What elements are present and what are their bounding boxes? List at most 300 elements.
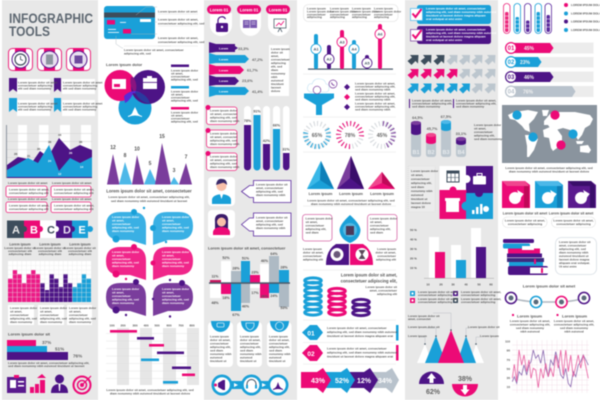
puzzle: C bbox=[47, 224, 55, 236]
area chart: 14 bbox=[80, 165, 84, 169]
icon: rising bars bbox=[30, 374, 46, 393]
diverging bar chart: 28% bbox=[280, 266, 288, 270]
icon cards with text: Lorem ipsum bbox=[210, 334, 229, 338]
cylinder chart: 67,5% bbox=[441, 115, 452, 119]
ribbons with text: consectetuer adipiscing bbox=[63, 104, 98, 108]
ribbons with text bbox=[9, 78, 102, 116]
arrow grid notes: sed diam nonummy bbox=[412, 104, 441, 108]
arrow percentage list: Lorem bbox=[219, 68, 229, 72]
triangle chart caption: sed diam nonummy nibh euismod tincidunt ut laoreet bbox=[111, 199, 187, 203]
cube captions: Lorem ipsum dolor sit amet, bbox=[505, 218, 545, 222]
diamond list: sed diam nonummy nibh bbox=[355, 98, 391, 102]
pyramids caption bbox=[307, 198, 395, 206]
pyramids caption: Lorem ipsum dolor sit amet, consectetuer adipiscing elit, sed bbox=[307, 198, 395, 202]
pin chart: A2 bbox=[326, 56, 332, 62]
venn legend: consectetuer bbox=[171, 116, 191, 120]
text cards: adipiscing elit, sed bbox=[10, 316, 37, 320]
timeline items: Lorem ipsum dolor sit amet, bbox=[554, 319, 594, 323]
arrow grid notes: consectetuer adipiscing elit, bbox=[456, 102, 497, 106]
cube captions: Lorem ipsum dolor sit amet bbox=[503, 212, 548, 216]
arrow percentage list: 23,6% bbox=[242, 79, 253, 83]
cylinder chart note: consectetuer bbox=[474, 130, 494, 134]
half circle 62%: 62% bbox=[426, 389, 441, 396]
checklist banners: adipiscing elit, sed diam nonummy nibh euismod bbox=[426, 10, 496, 14]
icon cards with text: consectetuer bbox=[240, 342, 260, 346]
callout: man: Lorem ipsum dolor sit bbox=[256, 182, 288, 186]
puzzle: B bbox=[30, 224, 38, 236]
cylinder chart note: sed diam nonummy bbox=[474, 137, 503, 141]
speech bubbles bbox=[106, 207, 193, 318]
vertical progress bars: 91% bbox=[253, 110, 261, 114]
cube captions bbox=[502, 212, 596, 228]
bar chart legend: Lorem ipsum dolor sit amet, bbox=[418, 290, 458, 294]
text cards: Lorem ipsum dolor bbox=[69, 306, 97, 310]
books note: aliquam erat volutpat. bbox=[559, 261, 590, 265]
half circle 62% bbox=[419, 372, 444, 396]
puzzle: consectetuer elit bbox=[38, 249, 62, 253]
puzzle: adipiscing diam bbox=[9, 252, 32, 256]
cylinder chart note: adipiscing elit, bbox=[474, 134, 495, 138]
pink text cards: Lorem ipsum dolor bbox=[210, 108, 238, 112]
stacked percentage bars: sed diam nonummy nibh euismod tincidunt ut laoreet bbox=[8, 364, 84, 368]
avatar: man bbox=[208, 177, 235, 206]
callout: woman: adipiscing elit, sed bbox=[256, 222, 283, 226]
speech bubbles: Lorem ipsum dolor bbox=[162, 287, 190, 291]
cylinder chart: B1 bbox=[412, 150, 420, 156]
cylinder chart: B4 bbox=[457, 150, 465, 156]
vertical progress bars: 66% bbox=[273, 124, 281, 128]
petal diagram: consectetuer bbox=[377, 254, 397, 258]
cylinder chart: B2 bbox=[427, 150, 435, 156]
gantt chart: 400 bbox=[143, 324, 149, 328]
pill icon cards: Lorem 01 bbox=[210, 8, 229, 12]
map caption: diam nonummy nibh euismod tincidunt ut laoreet dolore bbox=[509, 170, 589, 174]
text boxes with pink outline: consectetuer adipiscing elit bbox=[9, 207, 49, 211]
text boxes with pink outline: Lorem ipsum dolor sit amet bbox=[52, 181, 91, 185]
books note bbox=[556, 238, 596, 274]
arrow grid notes: consectetuer adipiscing elit, bbox=[412, 102, 453, 106]
bar chart legend: consectetuer adipiscing bbox=[461, 300, 496, 304]
diamond list: Lorem ipsum dolor sit amet, bbox=[355, 92, 395, 96]
numbered row 02 bbox=[302, 345, 398, 361]
puzzle: E bbox=[78, 224, 86, 236]
petal diagram: dolor sit amet, bbox=[375, 250, 396, 254]
triangle chart caption: Lorem ipsum dolor sit amet, consectetuer adipiscing elit, bbox=[108, 195, 190, 199]
top text panel: Lorem ipsum dolor bbox=[330, 10, 358, 14]
stacked percentage bars: 37% bbox=[42, 340, 51, 345]
diverging bar chart: 48% bbox=[211, 301, 219, 305]
diverging bar chart: Lorem ipsum dolor sit amet, consectetuer bbox=[208, 246, 286, 250]
bar chart: 10 bbox=[426, 282, 430, 286]
chevron percentages: 43% bbox=[311, 378, 326, 385]
side note box: sit amet, bbox=[411, 173, 423, 177]
gauge values bbox=[312, 133, 388, 139]
top text panel: adipiscing bbox=[330, 15, 345, 19]
cube captions: Lorem ipsum dolor sit amet bbox=[549, 212, 594, 216]
icon cards with text: euismod bbox=[210, 356, 223, 360]
text cards: sit amet, bbox=[10, 310, 22, 314]
icon cards with text: sed diam bbox=[269, 348, 282, 352]
icon cards with text: Lorem ipsum bbox=[269, 334, 288, 338]
bar chart legend: Lorem ipsum dolor sit amet, bbox=[461, 290, 501, 294]
speech bubbles: diam nonummy bbox=[162, 301, 185, 305]
side note box: Lorem ipsum dolor bbox=[411, 169, 439, 173]
numbered progress bars: 45% bbox=[524, 46, 535, 52]
checklist banners: erat volutpat ut wisi enim bbox=[426, 38, 462, 42]
pin chart: A5 bbox=[364, 60, 370, 66]
triangle chart: 12 bbox=[110, 145, 116, 151]
diverging bar chart: 46% bbox=[261, 259, 269, 263]
area chart: 30 bbox=[37, 147, 41, 151]
checklist banners: tincidunt ut laoreet dolore magna aliquam bbox=[426, 14, 486, 18]
venn legend: adipiscing elit, sed bbox=[171, 78, 198, 82]
checklist banners: Lorem ipsum dolor sit amet, consectetuer bbox=[426, 6, 487, 10]
bar chart: 40 % bbox=[410, 238, 417, 242]
text cards: consectetuer bbox=[10, 313, 30, 317]
diverging bar chart: 28% bbox=[232, 266, 240, 270]
stacked percentage bars: Lorem ipsum dolor sit bbox=[8, 332, 51, 336]
pyramids: Lorem ipsum bbox=[309, 192, 333, 196]
callout: woman: diam nonummy nibh bbox=[256, 226, 286, 230]
arrow percentage list bbox=[209, 42, 263, 97]
books bbox=[503, 239, 548, 275]
line chart bbox=[505, 340, 589, 393]
diamond list: consectetuer adipiscing elit, bbox=[355, 84, 396, 88]
text cards: diam nonummy bbox=[40, 320, 63, 324]
card callouts text: Lorem ipsum dolor sit amet, bbox=[158, 18, 198, 22]
diverging bar chart: 23% bbox=[251, 270, 259, 274]
pin chart: A4 bbox=[351, 46, 357, 52]
puzzle: Lorem ipsum dolor sit bbox=[34, 246, 66, 250]
books note: Lorem ipsum dolor sit bbox=[559, 240, 591, 244]
speech bubbles: Lorem ipsum dolor bbox=[162, 250, 190, 254]
area chart: 44 bbox=[58, 133, 62, 137]
pink text cards: diam nonummy nibh bbox=[210, 165, 240, 169]
map caption: Lorem ipsum dolor sit amet, consectetuer adipiscing elit, sed bbox=[505, 166, 593, 170]
numbered progress bars: 23% bbox=[520, 60, 531, 66]
petal diagram bbox=[302, 214, 398, 265]
area chart: 36 bbox=[48, 140, 52, 144]
side text card: nibh bbox=[271, 75, 277, 79]
icon cards with text: nonummy nibh bbox=[240, 352, 262, 356]
numbered row 01: 01 bbox=[307, 330, 315, 338]
numbered row 02: adipiscing elit, sed diam nonummy nibh euismod bbox=[327, 350, 397, 354]
side note box: consectetuer bbox=[411, 177, 431, 181]
puzzle: Lorem ipsum bbox=[9, 242, 31, 246]
gantt chart bbox=[106, 324, 199, 385]
side note box: nonummy nibh bbox=[411, 189, 433, 193]
triangle chart: 10 bbox=[134, 146, 140, 152]
speech bubbles: Lorem ipsum dolor bbox=[112, 215, 140, 219]
ribbons with text: elit sed diam nonummy bbox=[18, 108, 52, 112]
thermometer gauges bbox=[504, 4, 552, 34]
pin chart: A1 bbox=[313, 46, 319, 52]
cylinder chart: 33,1% bbox=[456, 132, 467, 136]
pixel bar chart bbox=[8, 261, 91, 302]
text cards: consectetuer bbox=[40, 313, 60, 317]
petal diagram: adipiscing elit, bbox=[306, 227, 327, 231]
checklist banners: Lorem ipsum dolor sit amet, consectetuer bbox=[426, 28, 487, 32]
icon cards with text: adipiscing elit, bbox=[240, 345, 261, 349]
timeline items: Lorem ipsum bbox=[562, 314, 588, 318]
arrow percentage list: Lorem bbox=[219, 79, 229, 83]
ribbons with text: elit sed diam nonummy bbox=[63, 86, 97, 90]
puzzle: adipiscing diam bbox=[39, 252, 62, 256]
pink text cards: diam nonummy nibh bbox=[210, 119, 240, 123]
text boxes with pink outline: Lorem ipsum dolor sit amet, bbox=[9, 204, 49, 208]
icon cards with text: Lorem ipsum bbox=[240, 334, 259, 338]
pink text cards: sit amet, consectet bbox=[210, 112, 237, 116]
speech bubbles: diam nonummy bbox=[162, 264, 185, 268]
top text panel: consectetuer bbox=[352, 12, 372, 16]
speech bubbles: Lorem ipsum dolor bbox=[112, 250, 140, 254]
pink text cards: adipiscing elit, sed bbox=[210, 116, 237, 120]
gantt chart: 300 bbox=[132, 324, 138, 328]
avatar: woman bbox=[208, 210, 235, 238]
speech bubbles: Lorem ipsum dolor bbox=[112, 287, 140, 291]
triangle chart: 8 bbox=[124, 153, 127, 159]
bar chart legend: Lorem ipsum dolor sit amet, bbox=[461, 297, 501, 301]
side note box: adipiscing elit, bbox=[411, 181, 432, 185]
speech bubbles: adipiscing elit, sed bbox=[112, 260, 139, 264]
diverging bar chart: 11% bbox=[212, 274, 219, 278]
vertical progress bars bbox=[244, 106, 290, 170]
ring stacks text: Lorem ipsum dolor sit amet, bbox=[341, 272, 397, 278]
bar chart: 60 bbox=[489, 282, 493, 286]
bar chart: 20 % bbox=[410, 256, 417, 260]
top text panel: Lorem ipsum bbox=[307, 6, 326, 10]
icon cards with text: adipiscing elit, bbox=[210, 345, 231, 349]
bar chart legend: consectetuer adipiscing bbox=[461, 293, 496, 297]
top text panel: Lorem ipsum dolor bbox=[307, 10, 335, 14]
numbered row 01: Lorem ipsum dolor sit amet, consectetuer bbox=[327, 326, 388, 330]
books note: euismod tincidunt ut bbox=[559, 254, 588, 258]
top text panel: consectetuer bbox=[307, 12, 327, 16]
icon cards with text: sed diam bbox=[210, 348, 223, 352]
top text panel bbox=[304, 4, 402, 22]
cylinder chart note bbox=[474, 123, 503, 141]
numbered row 02: tincidunt ut laoreet dolore magna aliquam erat bbox=[327, 354, 393, 358]
top text panel: Lorem ipsum bbox=[374, 6, 393, 10]
arrow percentage list: 61,7% bbox=[247, 68, 258, 72]
top text panel: adipiscing bbox=[374, 15, 389, 19]
chevron percentages bbox=[301, 368, 399, 393]
text boxes with pink outline: Lorem ipsum dolor sit amet bbox=[8, 181, 47, 185]
venn legend: sit amet, bbox=[171, 72, 183, 76]
timeline items: nibh euismod bbox=[520, 330, 540, 334]
diamond list: Lorem ipsum dolor sit amet, bbox=[355, 102, 395, 106]
speech bubbles: sit amet, bbox=[162, 254, 174, 258]
pink text cards: diam nonummy nibh bbox=[210, 142, 240, 146]
venn legend: sit amet, bbox=[171, 92, 183, 96]
cylinder chart: 64,5% bbox=[412, 116, 423, 120]
icon cards with text: dolor sit amet, bbox=[240, 338, 261, 342]
radial gauges bbox=[301, 119, 394, 151]
icon: target bbox=[74, 376, 91, 394]
bar chart: 20 bbox=[439, 282, 443, 286]
timeline bbox=[505, 284, 590, 308]
petal diagram: Lorem ipsum bbox=[303, 247, 322, 251]
speech bubbles: sit amet, bbox=[112, 218, 124, 222]
bar chart: 50 % bbox=[410, 228, 417, 232]
timeline: Lorem ipsum dolor sit amet bbox=[523, 284, 576, 288]
credit card bbox=[104, 6, 198, 48]
gantt chart: 500 bbox=[154, 324, 160, 328]
speech bubbles: adipiscing elit, sed bbox=[162, 226, 189, 230]
ring stacks bbox=[305, 278, 369, 316]
arrow grid notes: sed diam nonummy bbox=[456, 104, 485, 108]
diverging bar chart: 64% bbox=[270, 252, 278, 256]
bar chart legend: consectetuer adipiscing bbox=[418, 300, 453, 304]
diverging bar chart: 53% bbox=[280, 306, 288, 310]
half circle 38% bbox=[452, 376, 478, 396]
gantt caption: diam nonummy nibh euismod tincidunt ut laoreet dolore bbox=[110, 392, 190, 396]
speech bubbles: diam nonummy bbox=[112, 229, 135, 233]
line chart: 50 bbox=[507, 367, 510, 371]
top text panel: Lorem ipsum bbox=[330, 6, 349, 10]
speech bubbles: diam nonummy bbox=[162, 229, 185, 233]
speech bubbles: sit amet, bbox=[112, 290, 124, 294]
ribbons with text: Lorem ipsum dolor sit amet bbox=[18, 102, 57, 106]
diamond list: consectetuer adipiscing elit, bbox=[355, 104, 396, 108]
venn legend: Lorem ipsum dolor bbox=[171, 110, 199, 114]
bar chart legend: consectetuer adipiscing bbox=[418, 293, 453, 297]
numbered row 01: tincidunt ut laoreet dolore magna aliquam erat bbox=[327, 334, 393, 338]
numbered progress bars bbox=[505, 42, 594, 98]
text cards bbox=[8, 305, 97, 325]
pin chart: A3 bbox=[339, 40, 345, 44]
timeline items: consectetuer adipiscing elit, bbox=[510, 322, 550, 326]
diamond list: Lorem ipsum dolor sit amet, bbox=[355, 82, 395, 86]
pink text cards bbox=[206, 105, 240, 170]
side text card: euismod bbox=[271, 78, 284, 82]
side note box bbox=[408, 166, 439, 212]
card callouts text: Lorem ipsum dolor sit amet, consectetuer bbox=[124, 48, 185, 52]
pill icon cards bbox=[207, 5, 290, 36]
icon: id badge bbox=[7, 375, 26, 393]
petal diagram: adipiscing elit, bbox=[370, 227, 391, 231]
speech bubbles: diam nonummy bbox=[112, 264, 135, 268]
venn legend: Lorem ipsum dolor bbox=[171, 68, 199, 72]
area chart: 28 bbox=[14, 152, 18, 156]
gauge values: 45% bbox=[377, 133, 388, 139]
side text card: consectetuer bbox=[271, 58, 291, 62]
petal diagram: consectetuer bbox=[370, 224, 390, 228]
speech bubbles: consectetuer bbox=[112, 222, 132, 226]
world map bbox=[502, 105, 597, 163]
petal diagram: sit amet, bbox=[370, 220, 382, 224]
checklist banners: adipiscing elit, sed diam nonummy nibh euismod bbox=[426, 31, 496, 35]
timeline items: consectetuer adipiscing elit, bbox=[554, 322, 594, 326]
text cards: sit amet, bbox=[40, 310, 52, 314]
pyramids caption: diam nonummy nibh euismod tincidunt ut laoreet dolore bbox=[311, 202, 391, 206]
puzzle bbox=[4, 220, 96, 256]
cylinder chart bbox=[411, 115, 467, 157]
ring stacks text: consectetuer adipiscing elit, bbox=[341, 278, 397, 284]
gantt chart: 600 bbox=[166, 324, 172, 328]
card callouts text bbox=[124, 10, 205, 56]
top text panel: consectetuer bbox=[330, 12, 350, 16]
numbered progress bars: 46% bbox=[524, 75, 535, 81]
ribbons with text: Lorem ipsum dolor sit amet bbox=[18, 80, 57, 84]
diverging bar chart: 51% bbox=[242, 256, 250, 260]
speech bubbles: consectetuer bbox=[112, 257, 132, 261]
gantt chart: 100 bbox=[109, 324, 115, 328]
area chart bbox=[6, 125, 92, 178]
callout: woman: Lorem ipsum dolor sit bbox=[256, 216, 288, 220]
puzzle: Lorem ipsum bbox=[39, 242, 61, 246]
petal diagram: consectetuer bbox=[306, 224, 325, 228]
ribbons with text: elit sed diam nonummy bbox=[63, 108, 97, 112]
title: INFOGRAPHIC bbox=[9, 11, 93, 26]
icon cards with text: adipiscing elit, bbox=[269, 345, 290, 349]
top text panel: Lorem ipsum dolor bbox=[352, 10, 380, 14]
diverging bar chart: 52% bbox=[222, 256, 230, 260]
funnel bbox=[304, 79, 337, 115]
gantt caption bbox=[106, 388, 194, 396]
text boxes with pink outline: Lorem ipsum dolor sit amet bbox=[52, 197, 91, 201]
arrow grid notes: Lorem ipsum dolor sit amet, bbox=[456, 98, 496, 102]
triangle group chart: Lorem ipsum bbox=[480, 334, 499, 338]
pink text cards: Lorem ipsum dolor bbox=[210, 154, 238, 158]
icon cards with text: sed diam bbox=[240, 348, 253, 352]
side note box: sed diam bbox=[411, 185, 424, 189]
speech bubbles: sit amet, bbox=[162, 290, 174, 294]
gauge values: 65% bbox=[312, 133, 323, 139]
text boxes with pink outline: Lorem ipsum dolor sit amet, bbox=[54, 204, 94, 208]
top text panel: Lorem ipsum bbox=[352, 6, 371, 10]
numbered progress bars: 04 bbox=[508, 90, 515, 96]
petal diagram: adipiscing elit bbox=[303, 258, 323, 262]
top text panel: consectetuer bbox=[374, 12, 394, 16]
speech bubbles: adipiscing elit, sed bbox=[162, 260, 189, 264]
petal diagram: adipiscing elit bbox=[376, 258, 396, 262]
timeline items: nibh euismod bbox=[564, 330, 584, 334]
side text card: tincidunt bbox=[271, 82, 284, 86]
arrow grid bbox=[408, 55, 496, 94]
cube captions: consectetuer adipiscing bbox=[556, 222, 591, 226]
card callouts text: adipiscing elit, sed bbox=[124, 52, 151, 56]
text boxes with pink outline: consectetuer adipiscing elit bbox=[54, 207, 94, 211]
puzzle: Lorem ipsum bbox=[69, 242, 91, 246]
pin chart bbox=[308, 24, 393, 70]
bar chart legend bbox=[410, 290, 501, 304]
checklist banners bbox=[410, 5, 496, 44]
text boxes with pink outline: consectetuer adipiscing elit bbox=[54, 191, 94, 195]
speech bubbles: Lorem ipsum dolor bbox=[162, 215, 190, 219]
diamond list: consectetuer adipiscing elit, bbox=[355, 94, 396, 98]
speech bubbles: diam nonummy bbox=[112, 301, 135, 305]
triangle group chart: Lorem ipsum dolor sit bbox=[408, 314, 440, 318]
petal diagram: Lorem ipsum dolor bbox=[370, 216, 398, 220]
stacked percentage bars: Lorem ipsum dolor sit amet, consectetuer adipiscing elit, bbox=[8, 361, 90, 365]
pyramids bbox=[307, 156, 395, 196]
pink text cards: adipiscing elit, sed bbox=[210, 162, 237, 166]
callout: woman bbox=[242, 213, 291, 236]
ring stacks text: amet, consectetuer bbox=[370, 288, 398, 292]
side text card: nonummy bbox=[271, 72, 286, 76]
diverging bar chart: 46% bbox=[242, 304, 250, 308]
stacked percentage bars: 76% bbox=[73, 354, 82, 358]
ribbons with text: consectetuer adipiscing bbox=[18, 84, 53, 88]
venn diagram bbox=[104, 70, 165, 124]
timeline items bbox=[510, 314, 594, 334]
half circle 38%: 38% bbox=[458, 376, 473, 383]
books note: diam nonummy nibh bbox=[559, 250, 589, 254]
pink text cards: adipiscing elit, sed bbox=[210, 138, 237, 142]
stacked percentage bars: 51% bbox=[55, 346, 64, 352]
diverging bar chart: 26% bbox=[261, 294, 269, 298]
